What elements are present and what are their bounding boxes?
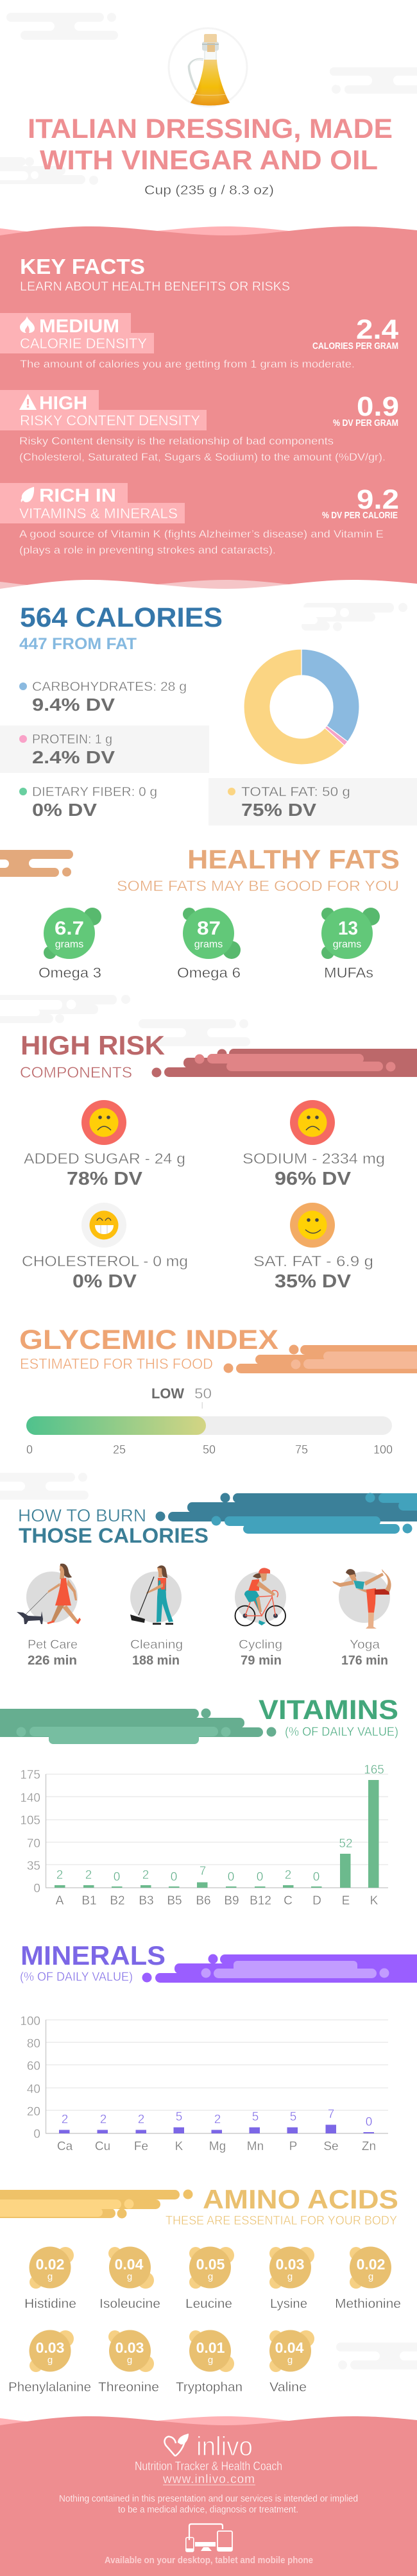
heading: minerals: MINERALS bbox=[21, 1940, 166, 1970]
bar chart: vitamins: 2 bbox=[142, 1868, 149, 1882]
bar chart: vitamins: 7 bbox=[200, 1865, 206, 1878]
risk: cholesterol: CHOLESTEROL - 0 mg bbox=[22, 1253, 188, 1269]
bar chart: vitamins: E bbox=[342, 1894, 350, 1908]
bar chart: vitamins: 35 bbox=[27, 1860, 40, 1873]
bar chart: minerals: Fe bbox=[134, 2140, 148, 2153]
panel: footer bbox=[0, 2416, 417, 2576]
bar chart: vitamins: B12 bbox=[250, 1894, 271, 1908]
fact: medium calorie density: MEDIUM bbox=[39, 316, 119, 337]
bar chart: vitamins: 165 bbox=[364, 1763, 384, 1777]
icon: oil and vinegar bottle in circle bbox=[169, 28, 247, 106]
heading: how to burn those calories bbox=[18, 1505, 208, 1547]
bar chart: minerals: 100 bbox=[20, 2015, 40, 2028]
bar chart: vitamins: 2 bbox=[85, 1868, 92, 1882]
heading: minerals bbox=[20, 1940, 166, 1984]
figure: woman in dancer pose bbox=[332, 1569, 391, 1629]
heading: healthy fats: SOME FATS MAY BE GOOD FOR YOU bbox=[117, 877, 399, 894]
bar chart: minerals: 2 bbox=[62, 2113, 68, 2126]
fact: high risky content density: HIGH bbox=[39, 393, 87, 414]
amino acid: lysine: Lysine bbox=[270, 2297, 307, 2311]
heading: glycemic index bbox=[19, 1325, 278, 1372]
decoration: healthy fats swoosh bbox=[0, 850, 74, 877]
heading: vitamins: VITAMINS bbox=[259, 1695, 398, 1725]
fact: medium calorie density: CALORIES PER GRAM bbox=[312, 341, 398, 352]
activity: yoga: Yoga bbox=[350, 1638, 380, 1652]
stat: omega 6: grams bbox=[194, 939, 223, 950]
bar chart: vitamins: C bbox=[284, 1894, 293, 1908]
bar chart: vitamins: D bbox=[312, 1894, 321, 1908]
risk: saturated fat: SAT. FAT - 6.9 g bbox=[253, 1253, 373, 1269]
amino acid: lysine bbox=[269, 2246, 314, 2311]
bar chart: vitamins: 175 bbox=[20, 1768, 40, 1782]
risk: sodium: 96% DV bbox=[275, 1169, 352, 1189]
amino acid: isoleucine bbox=[99, 2246, 160, 2311]
risk: cholesterol: 0% DV bbox=[72, 1271, 137, 1292]
decoration: minerals swoosh bbox=[142, 1954, 417, 1983]
bar chart: vitamins: B9 bbox=[224, 1894, 239, 1908]
text: availability: Available on your desktop, tablet and mobile phone bbox=[105, 2555, 313, 2566]
heading: how to burn those calories: THOSE CALORIES bbox=[19, 1524, 208, 1547]
bar chart: minerals: 0 bbox=[366, 2115, 372, 2129]
stat: omega 6 bbox=[177, 908, 241, 981]
legend: total fat: 75% DV bbox=[241, 800, 316, 820]
logo: inlivo bbox=[165, 2431, 253, 2461]
stat: mufas: MUFAs bbox=[324, 965, 373, 981]
title bbox=[28, 114, 393, 176]
activity: cleaning: Cleaning bbox=[130, 1638, 183, 1652]
bar chart: vitamins bbox=[20, 1763, 388, 1908]
amino acid: valine bbox=[269, 2330, 314, 2394]
amino acid: histidine: Histidine bbox=[24, 2297, 76, 2311]
amino acid: threonine bbox=[98, 2330, 159, 2394]
activity: pet care bbox=[17, 1564, 81, 1668]
fact: rich in vitamins and minerals: % DV PER CALORIE bbox=[322, 510, 398, 521]
activity: cycling: 79 min bbox=[241, 1654, 282, 1668]
text: tagline: Nutrition Tracker & Health Coach bbox=[135, 2460, 282, 2473]
bar chart: minerals: K bbox=[175, 2140, 183, 2153]
fact: high risky content density bbox=[0, 390, 399, 463]
bar chart: minerals: Mg bbox=[209, 2140, 226, 2153]
bar chart: vitamins: 140 bbox=[20, 1792, 40, 1805]
legend: carbohydrates: CARBOHYDRATES: 28 g bbox=[32, 680, 187, 694]
legend: dietary fiber: DIETARY FIBER: 0 g bbox=[32, 785, 157, 799]
logo: inlivo: inlivo bbox=[196, 2431, 253, 2461]
bar chart: minerals bbox=[20, 2015, 388, 2153]
risk: sodium: SODIUM - 2334 mg bbox=[243, 1150, 385, 1167]
bar chart: minerals: 0 bbox=[33, 2128, 40, 2141]
legend: total fat bbox=[208, 778, 417, 826]
amino acid: leucine bbox=[185, 2246, 234, 2311]
bar chart: minerals: Se bbox=[323, 2140, 339, 2153]
amino acid: lysine: g bbox=[287, 2271, 293, 2282]
stat: omega 3: grams bbox=[55, 939, 83, 950]
fact: rich in vitamins and minerals: (plays a role in preventing strokes and cataracts). bbox=[19, 544, 276, 556]
heading: healthy fats bbox=[117, 844, 400, 894]
amino acid: valine: g bbox=[287, 2355, 293, 2366]
fact: high risky content density: % DV PER GRAM bbox=[333, 418, 398, 428]
heading: 564 calories: 447 FROM FAT bbox=[19, 635, 137, 653]
bar chart: minerals: 80 bbox=[27, 2037, 40, 2051]
stat: omega 3: 6.7 bbox=[55, 918, 84, 939]
heading: high risk components bbox=[20, 1030, 165, 1081]
amino acid: isoleucine: Isoleucine bbox=[99, 2297, 160, 2311]
stat: omega 3 bbox=[38, 908, 101, 981]
risk: saturated fat bbox=[253, 1203, 373, 1292]
fact: rich in vitamins and minerals bbox=[0, 483, 399, 556]
amino acid: leucine: Leucine bbox=[185, 2297, 232, 2311]
bar chart: vitamins: B1 bbox=[81, 1894, 97, 1908]
heading: 564 calories: 564 CALORIES bbox=[20, 602, 223, 633]
chart: glycemic index bar: 75 bbox=[295, 1443, 308, 1456]
bar chart: vitamins: B3 bbox=[139, 1894, 154, 1908]
fact: high risky content density: RISKY CONTENT DENSITY bbox=[20, 412, 200, 428]
fact: rich in vitamins and minerals: RICH IN bbox=[39, 486, 116, 506]
icon: leaf bbox=[21, 487, 34, 502]
link: website: www.inlivo.com bbox=[162, 2473, 255, 2486]
chart: glycemic index bar: 0 bbox=[26, 1443, 33, 1456]
heading: amino acids bbox=[166, 2184, 398, 2228]
fact: high risky content density: (Cholesterol, Saturated Fat, Sugars & Sodium) to the amount (%DV/gr). bbox=[19, 451, 386, 463]
amino acid: tryptophan: g bbox=[208, 2355, 213, 2366]
chart: glycemic index bar: 50 bbox=[194, 1385, 212, 1402]
fact: medium calorie density: The amount of calories you are getting from 1 gram is moderate. bbox=[20, 358, 355, 370]
fact: high risky content density: 0.9 bbox=[357, 391, 399, 422]
bar chart: minerals: 20 bbox=[27, 2105, 40, 2119]
heading: healthy fats: HEALTHY FATS bbox=[187, 844, 400, 874]
decoration: high risk swoosh bbox=[151, 1049, 417, 1078]
amino acid: histidine bbox=[24, 2246, 76, 2311]
bar chart: minerals: 5 bbox=[290, 2110, 296, 2124]
fact: medium calorie density: 2.4 bbox=[356, 314, 398, 345]
heading: key facts: KEY FACTS bbox=[20, 255, 145, 278]
amino acid: valine: 0.04 bbox=[275, 2339, 304, 2356]
amino acid: leucine: g bbox=[208, 2271, 213, 2282]
bar chart: vitamins: 105 bbox=[20, 1814, 40, 1827]
risk: added sugar bbox=[24, 1100, 185, 1189]
heading: glycemic index: ESTIMATED FOR THIS FOOD bbox=[20, 1355, 213, 1372]
amino acid: valine: Valine bbox=[269, 2380, 307, 2394]
bar chart: minerals: 5 bbox=[252, 2110, 259, 2124]
bar chart: minerals: Ca bbox=[57, 2140, 73, 2153]
bar chart: vitamins: 52 bbox=[339, 1837, 353, 1851]
amino acid: phenylalanine: Phenylalanine bbox=[8, 2380, 91, 2394]
bar chart: minerals: Zn bbox=[362, 2140, 376, 2153]
amino acid: threonine: g bbox=[127, 2355, 132, 2366]
icon: warning triangle bbox=[19, 394, 37, 410]
heading: amino acids: AMINO ACIDS bbox=[203, 2184, 398, 2214]
bar chart: vitamins: 0 bbox=[33, 1882, 40, 1895]
title: ITALIAN DRESSING, MADE bbox=[28, 114, 393, 144]
bar chart: minerals: Cu bbox=[95, 2140, 110, 2153]
amino acid: isoleucine: g bbox=[127, 2271, 132, 2282]
legend: protein: PROTEIN: 1 g bbox=[32, 733, 112, 747]
amino acid: tryptophan: Tryptophan bbox=[176, 2380, 243, 2394]
amino acid: threonine: 0.03 bbox=[115, 2339, 144, 2356]
amino acid: histidine: g bbox=[47, 2271, 53, 2282]
heading: how to burn those calories: HOW TO BURN bbox=[18, 1505, 146, 1525]
risk: sodium bbox=[243, 1100, 385, 1189]
fact: high risky content density: Risky Content density is the relationship of bad components bbox=[19, 435, 334, 447]
icon: desktop tablet and mobile devices bbox=[186, 2524, 232, 2552]
amino acid: methionine bbox=[335, 2246, 401, 2311]
bar chart: minerals: 5 bbox=[176, 2110, 182, 2124]
amino acid: phenylalanine bbox=[8, 2330, 91, 2394]
bar chart: minerals: 2 bbox=[214, 2113, 221, 2126]
heading: amino acids: THESE ARE ESSENTIAL FOR YOUR BODY bbox=[166, 2214, 397, 2228]
bar chart: minerals: Mn bbox=[247, 2140, 264, 2153]
amino acid: methionine: 0.02 bbox=[357, 2256, 385, 2273]
chart: glycemic index bar bbox=[26, 1385, 393, 1456]
bar chart: vitamins: B6 bbox=[196, 1894, 211, 1908]
stat: omega 6: Omega 6 bbox=[177, 965, 241, 981]
legend: dietary fiber bbox=[19, 785, 157, 820]
decoration: glycemic swoosh bbox=[223, 1344, 417, 1373]
bar chart: vitamins: 0 bbox=[171, 1870, 177, 1884]
stat: mufas: 13 bbox=[338, 918, 358, 939]
activity: cleaning bbox=[130, 1566, 183, 1668]
bar chart: minerals: 60 bbox=[27, 2060, 40, 2073]
activity: yoga bbox=[332, 1569, 391, 1668]
amino acid: methionine: Methionine bbox=[335, 2297, 401, 2311]
amino acid: phenylalanine: g bbox=[47, 2355, 53, 2366]
risk: added sugar: 78% DV bbox=[67, 1169, 143, 1189]
legend: dietary fiber: 0% DV bbox=[32, 800, 97, 820]
bar chart: vitamins: 0 bbox=[114, 1870, 120, 1884]
activity: yoga: 176 min bbox=[341, 1654, 388, 1668]
panel: key facts bbox=[0, 226, 417, 600]
bar chart: vitamins: 70 bbox=[27, 1837, 40, 1851]
activity: cycling bbox=[235, 1568, 286, 1668]
bar chart: minerals: 2 bbox=[138, 2113, 144, 2126]
chart: glycemic index bar: 25 bbox=[113, 1443, 126, 1456]
text: disclaimer: Nothing contained in this presentation and our services is intended or implied bbox=[59, 2493, 358, 2504]
heading: high risk components: HIGH RISK bbox=[21, 1030, 165, 1060]
bar chart: minerals: P bbox=[289, 2140, 297, 2153]
amino acid: lysine: 0.03 bbox=[276, 2256, 304, 2273]
subheading: learn about health benefits: LEARN ABOUT HEALTH BENEFITS OR RISKS bbox=[20, 280, 290, 294]
bar chart: vitamins: 0 bbox=[228, 1870, 234, 1884]
legend: total fat: TOTAL FAT: 50 g bbox=[241, 785, 350, 799]
amino acid: isoleucine: 0.04 bbox=[115, 2256, 144, 2273]
activity: pet care: Pet Care bbox=[28, 1638, 78, 1652]
bar chart: vitamins: 2 bbox=[285, 1868, 291, 1882]
bar chart: vitamins: 2 bbox=[56, 1868, 63, 1882]
bar chart: vitamins: 0 bbox=[257, 1870, 263, 1884]
amino acid: histidine: 0.02 bbox=[36, 2256, 64, 2273]
fact: medium calorie density bbox=[0, 313, 398, 370]
activity: cleaning: 188 min bbox=[132, 1654, 180, 1668]
legend: protein bbox=[0, 725, 209, 773]
amino acid: methionine: g bbox=[368, 2271, 373, 2282]
donut chart: calorie sources bbox=[244, 649, 359, 765]
bar chart: vitamins: 0 bbox=[313, 1870, 319, 1884]
fact: medium calorie density: CALORIE DENSITY bbox=[20, 335, 147, 352]
risk: cholesterol bbox=[22, 1203, 188, 1292]
activity: pet care: 226 min bbox=[28, 1654, 77, 1668]
amino acid: leucine: 0.05 bbox=[196, 2256, 225, 2273]
chart: glycemic index bar: LOW bbox=[151, 1385, 184, 1402]
heading: vitamins: (% OF DAILY VALUE) bbox=[285, 1725, 398, 1739]
bar chart: vitamins: B5 bbox=[167, 1894, 182, 1908]
risk: saturated fat: 35% DV bbox=[275, 1271, 352, 1292]
text: disclaimer bbox=[59, 2493, 358, 2515]
fact: rich in vitamins and minerals: 9.2 bbox=[357, 484, 399, 515]
icon: flame bbox=[20, 316, 35, 333]
chart: glycemic index bar: 100 bbox=[373, 1443, 393, 1456]
figure: woman cycling bbox=[235, 1568, 285, 1625]
stat: mufas bbox=[321, 908, 380, 981]
bar chart: minerals: 7 bbox=[328, 2108, 334, 2121]
amino acid: tryptophan bbox=[176, 2330, 243, 2394]
bar chart: minerals: 2 bbox=[100, 2113, 106, 2126]
risk: added sugar: ADDED SUGAR - 24 g bbox=[24, 1150, 185, 1167]
subtitle: serving size: Cup (235 g / 8.3 oz) bbox=[144, 183, 274, 198]
amino acid: phenylalanine: 0.03 bbox=[36, 2339, 64, 2356]
bar chart: vitamins: A bbox=[56, 1894, 64, 1908]
heading: glycemic index: GLYCEMIC INDEX bbox=[19, 1325, 278, 1355]
heading: 564 calories bbox=[19, 602, 223, 653]
fact: rich in vitamins and minerals: VITAMINS & MINERALS bbox=[19, 505, 178, 521]
bar chart: minerals: 40 bbox=[27, 2083, 40, 2096]
figure: woman sweeping bbox=[130, 1566, 173, 1625]
heading: minerals: (% OF DAILY VALUE) bbox=[20, 1970, 133, 1984]
title: WITH VINEGAR AND OIL bbox=[40, 145, 378, 176]
stat: omega 6: 87 bbox=[197, 918, 221, 939]
bar chart: vitamins: K bbox=[370, 1894, 379, 1908]
bar chart: vitamins: B2 bbox=[110, 1894, 125, 1908]
amino acid: tryptophan: 0.01 bbox=[196, 2339, 225, 2356]
decoration: amino acids swoosh bbox=[0, 2190, 192, 2218]
stat: omega 3: Omega 3 bbox=[38, 965, 101, 981]
activity: cycling: Cycling bbox=[239, 1638, 282, 1652]
fact: rich in vitamins and minerals: A good source of Vitamin K (fights Alzheimer’s disease) and Vitamin E bbox=[19, 528, 384, 540]
decoration: burn calories swoosh bbox=[155, 1493, 417, 1534]
legend: carbohydrates bbox=[19, 680, 187, 715]
heading: high risk components: COMPONENTS bbox=[20, 1064, 132, 1081]
heading: vitamins bbox=[259, 1695, 398, 1739]
chart: glycemic index bar: 50 bbox=[203, 1443, 216, 1456]
amino acid: threonine: Threonine bbox=[98, 2380, 159, 2394]
legend: carbohydrates: 9.4% DV bbox=[32, 695, 115, 715]
text: disclaimer: to be a medical advice, diagnosis or treatment. bbox=[118, 2504, 298, 2515]
decoration: vitamins swoosh bbox=[0, 1709, 276, 1744]
figure: woman walking dog bbox=[17, 1564, 81, 1624]
stat: mufas: grams bbox=[333, 939, 361, 950]
legend: protein: 2.4% DV bbox=[32, 747, 115, 767]
